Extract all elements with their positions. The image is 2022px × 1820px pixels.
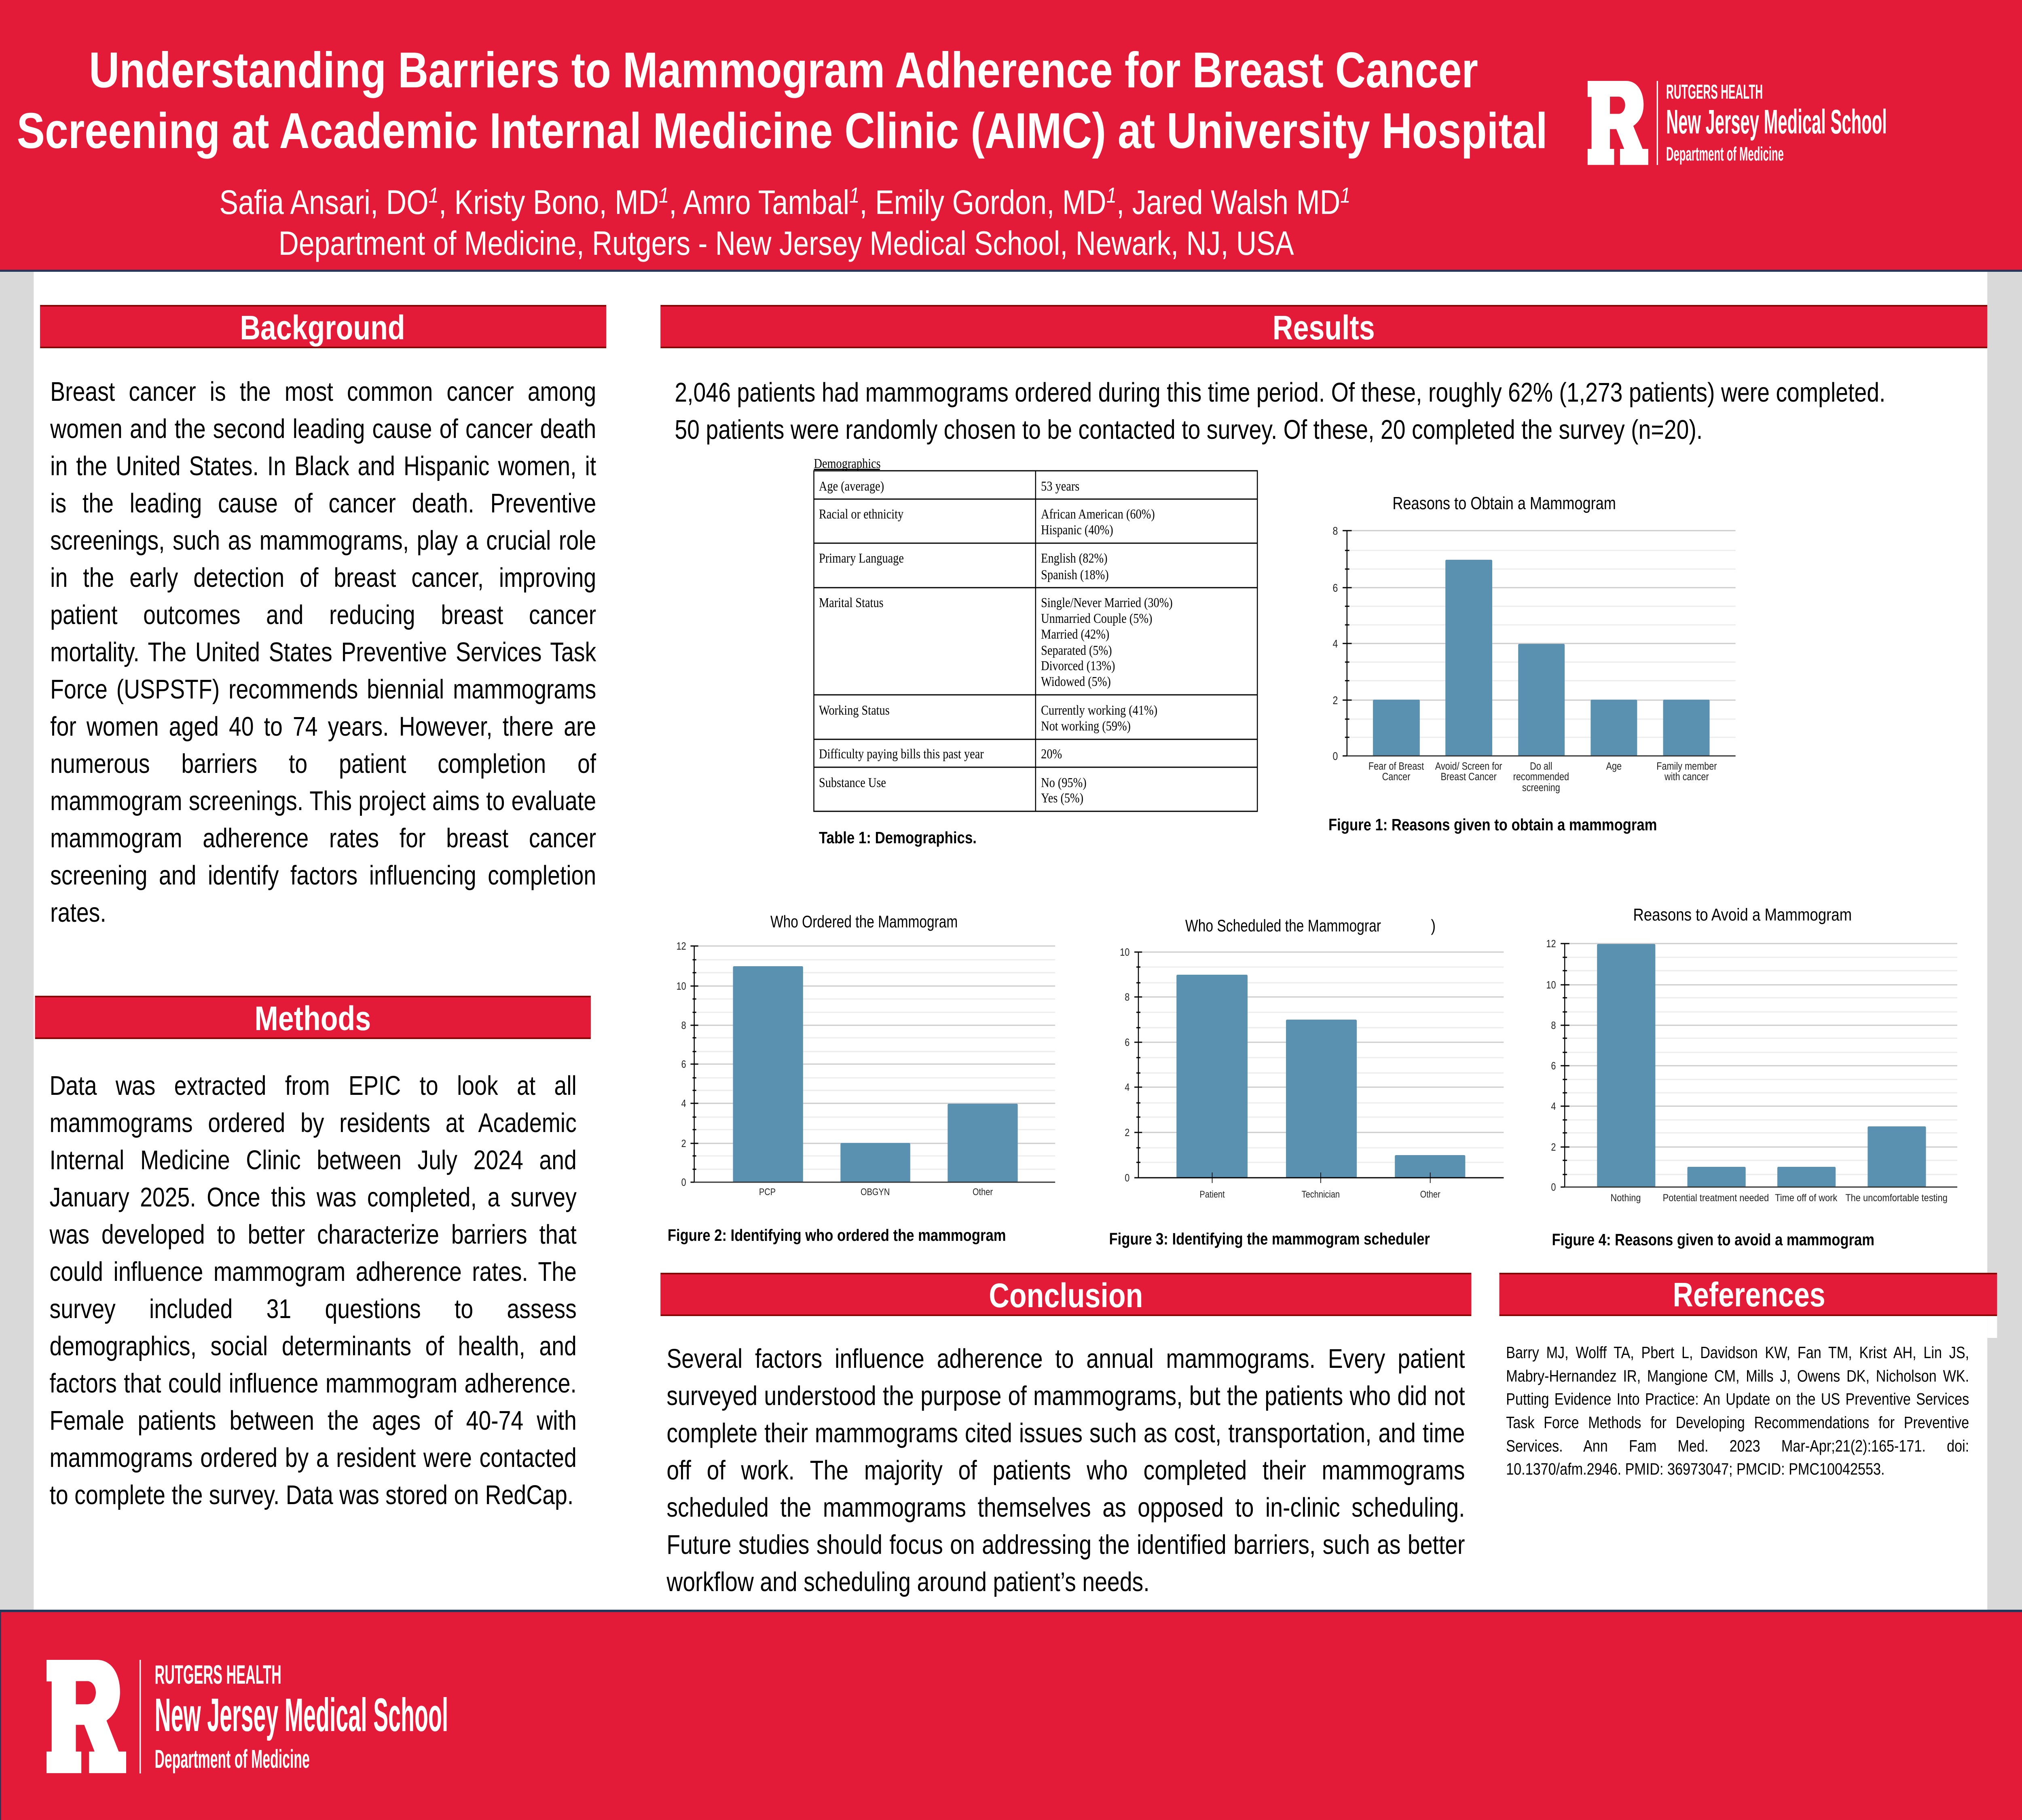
methods text: survey included 31 questions to assess xyxy=(49,1294,577,1324)
chart: who ordered the mammogram: 8 xyxy=(681,1020,686,1032)
chart: who scheduled the mammogram: 0 xyxy=(1125,1172,1129,1184)
chart: who scheduled the mammogram: 4 xyxy=(1125,1081,1129,1094)
table 1: demographics: Spanish (18%) xyxy=(1041,567,1109,582)
methods text: factors that could influence mammogram adherence. xyxy=(49,1369,577,1399)
icon: Rutgers block R logo mark xyxy=(47,1660,126,1773)
authors and affiliation: Safia Ansari, DO xyxy=(219,184,429,221)
chart: who ordered the mammogram: 4 xyxy=(681,1098,686,1110)
background side margins xyxy=(0,272,2022,1610)
chart: reasons to obtain a mammogram xyxy=(1332,493,1736,794)
chart: who scheduled the mammogram: 10 xyxy=(1120,946,1129,959)
chart: reasons to obtain a mammogram: 6 xyxy=(1332,582,1338,595)
background text: rates. xyxy=(50,898,106,928)
chart: reasons to obtain a mammogram: screening xyxy=(1522,782,1560,794)
logo wordmark: RUTGERS HEALTH xyxy=(1666,80,1763,103)
authors and affiliation: , Kristy Bono, MD xyxy=(439,184,659,221)
chart: reasons to obtain a mammogram: Avoid/ Screen for xyxy=(1435,760,1502,772)
table 1: demographics: Not working (59%) xyxy=(1041,718,1131,734)
section header: Background: Background xyxy=(240,309,405,347)
chart: reasons to obtain a mammogram: Do all xyxy=(1530,760,1552,772)
background text: is the leading cause of cancer death. Preventive xyxy=(50,489,596,518)
chart: reasons to obtain a mammogram: with cancer xyxy=(1664,771,1709,783)
results summary text xyxy=(675,374,1955,451)
chart: who ordered the mammogram: 2 xyxy=(681,1138,686,1150)
chart: who ordered the mammogram: 10 xyxy=(677,980,686,993)
footer band xyxy=(0,1610,2022,1820)
authors and affiliation: , Jared Walsh MD xyxy=(1117,184,1340,221)
chart: reasons to obtain a mammogram: Age xyxy=(1606,760,1622,772)
background text: in the United States. In Black and Hispanic women, it xyxy=(50,451,596,481)
chart: reasons to obtain a mammogram: recommended xyxy=(1513,771,1569,783)
table 1: demographics: Age (average) xyxy=(819,478,884,494)
chart: who scheduled the mammogram: Who Scheduled the Mammograr xyxy=(1185,916,1381,935)
logo divider xyxy=(1657,81,1658,165)
methods text: to complete the survey. Data was stored on RedCap. xyxy=(49,1480,573,1510)
footer logo xyxy=(47,1659,448,1773)
white notch behind references header xyxy=(1987,1273,1997,1338)
chart: reasons to avoid a mammogram: The uncomfortable testing xyxy=(1845,1192,1948,1203)
chart: who scheduled the mammogram: 6 xyxy=(1125,1037,1129,1049)
references text: Barry MJ, Wolff TA, Pbert L, Davidson KW, Fan TM, Krist AH, Lin JS, xyxy=(1506,1343,1969,1362)
results summary text: 2,046 patients had mammograms ordered during this time period. Of these, roughly 62% (1,273 patients) were completed. xyxy=(675,378,1885,408)
figure 4 caption: Figure 4: Reasons given to avoid a mammogram xyxy=(1552,1230,1874,1249)
chart: reasons to avoid a mammogram xyxy=(1546,905,1957,1203)
table 1: demographics: Working Status xyxy=(819,703,890,718)
chart: reasons to obtain a mammogram: 0 xyxy=(1332,750,1338,763)
table 1: demographics: 20% xyxy=(1041,746,1062,762)
conclusion text: off of work. The majority of patients who completed their mammograms xyxy=(666,1456,1465,1486)
conclusion text: complete their mammograms cited issues such as cost, transportation, and time xyxy=(666,1418,1465,1448)
logo wordmark xyxy=(1666,80,1887,165)
table 1: demographics: Single/Never Married (30%) xyxy=(1041,595,1173,610)
authors and affiliation: 1 xyxy=(1340,183,1350,207)
logo wordmark: RUTGERS HEALTH xyxy=(154,1659,281,1689)
chart: reasons to avoid a mammogram: 8 xyxy=(1551,1020,1556,1032)
section header: References xyxy=(1500,1273,1997,1316)
chart: reasons to obtain a mammogram: Reasons to Obtain a Mammogram xyxy=(1392,493,1616,513)
chart: who scheduled the mammogram: Other xyxy=(1420,1189,1440,1200)
authors and affiliation: 1 xyxy=(849,183,859,207)
figure 1 caption: Figure 1: Reasons given to obtain a mammogram xyxy=(1328,815,1657,834)
conclusion text: Several factors influence adherence to annual mammograms. Every patient xyxy=(666,1344,1465,1374)
background text: mortality. The United States Preventive Services Task xyxy=(50,637,596,667)
chart: reasons to obtain a mammogram: 4 xyxy=(1332,638,1338,650)
figure 3 caption: Figure 3: Identifying the mammogram scheduler xyxy=(1109,1230,1430,1248)
references text: Putting Evidence Into Practice: An Update on the US Preventive Services xyxy=(1506,1390,1969,1408)
conclusion text: workflow and scheduling around patient’s needs. xyxy=(666,1567,1150,1597)
background text xyxy=(50,373,596,940)
background text: screening and identify factors influencing completion xyxy=(50,861,596,891)
header band xyxy=(0,0,2022,272)
chart: reasons to avoid a mammogram: 0 xyxy=(1551,1181,1556,1194)
chart: who scheduled the mammogram: Patient xyxy=(1199,1189,1225,1200)
chart: reasons to avoid a mammogram: Time off of work xyxy=(1775,1192,1838,1203)
chart: who ordered the mammogram: 0 xyxy=(681,1177,686,1189)
background text: women and the second leading cause of cancer death xyxy=(50,414,596,444)
chart: who ordered the mammogram: 6 xyxy=(681,1058,686,1071)
logo wordmark: New Jersey Medical School xyxy=(154,1689,448,1741)
background text: mammogram screenings. This project aims to evaluate xyxy=(50,786,596,816)
main white content panel xyxy=(34,272,1987,1610)
chart: reasons to avoid a mammogram: Reasons to Avoid a Mammogram xyxy=(1633,905,1852,925)
table 1: demographics: African American (60%) xyxy=(1041,506,1155,522)
table 1: demographics: Demographics xyxy=(814,456,881,471)
methods text xyxy=(49,1067,577,1520)
table 1: demographics: Hispanic (40%) xyxy=(1041,522,1113,538)
table 1: demographics: Marital Status xyxy=(819,595,884,610)
chart: reasons to avoid a mammogram: 6 xyxy=(1551,1060,1556,1072)
chart: who scheduled the mammogram: 8 xyxy=(1125,991,1129,1003)
methods text: Female patients between the ages of 40-74 with xyxy=(49,1406,577,1436)
logo wordmark xyxy=(154,1659,448,1773)
table 1: demographics: Difficulty paying bills this past year xyxy=(819,746,984,762)
chart: reasons to avoid a mammogram: Nothing xyxy=(1610,1192,1641,1203)
methods text: Internal Medicine Clinic between July 2024 and xyxy=(49,1145,577,1175)
chart: reasons to obtain a mammogram: 2 xyxy=(1332,694,1338,707)
table 1: demographics: Unmarried Couple (5%) xyxy=(1041,611,1152,626)
figure 2 caption: Figure 2: Identifying who ordered the mammogram xyxy=(668,1226,1006,1244)
title: Understanding Barriers to Mammogram Adherence for Breast Cancer xyxy=(89,42,1478,98)
methods text: demographics, social determinants of health, and xyxy=(49,1331,577,1361)
section header: Results xyxy=(660,305,1987,348)
references text xyxy=(1506,1341,1969,1483)
chart: who ordered the mammogram xyxy=(677,912,1055,1197)
chart: reasons to avoid a mammogram: Potential treatment needed xyxy=(1663,1192,1769,1203)
section header: Methods xyxy=(35,996,591,1039)
authors and affiliation: 1 xyxy=(659,183,669,207)
authors and affiliation xyxy=(219,183,1350,262)
title xyxy=(17,42,1548,159)
table 1: demographics xyxy=(814,456,1257,811)
background text: for women aged 40 to 74 years. However, there are xyxy=(50,712,596,742)
background text: mammogram adherence rates for breast cancer xyxy=(50,823,596,853)
table 1: demographics: Married (42%) xyxy=(1041,626,1109,642)
table 1: demographics: 53 years xyxy=(1041,478,1079,494)
methods text: was developed to better characterize barriers that xyxy=(49,1220,577,1250)
background text: in the early detection of breast cancer, improving xyxy=(50,563,596,593)
chart: reasons to obtain a mammogram: Fear of Breast xyxy=(1368,760,1424,772)
chart: who scheduled the mammogram: Technician xyxy=(1302,1189,1340,1200)
table 1: demographics: Divorced (13%) xyxy=(1041,658,1115,673)
chart: who scheduled the mammogram xyxy=(1120,916,1504,1200)
table 1: demographics: Yes (5%) xyxy=(1041,790,1083,806)
references text: 10.1370/afm.2946. PMID: 36973047; PMCID: PMC10042553. xyxy=(1506,1460,1885,1478)
section header: Results: Results xyxy=(1273,309,1375,347)
authors and affiliation: , Amro Tambal xyxy=(669,184,849,221)
section header: Conclusion: Conclusion xyxy=(989,1277,1143,1314)
conclusion text: scheduled the mammograms themselves as opposed to in-clinic scheduling. xyxy=(666,1493,1465,1523)
table 1: demographics: English (82%) xyxy=(1041,550,1108,566)
methods text: mammograms ordered by a resident were contacted xyxy=(49,1443,577,1473)
conclusion text xyxy=(666,1340,1465,1603)
references text: Task Force Methods for Developing Recommendations for Preventive xyxy=(1506,1413,1969,1432)
chart: reasons to obtain a mammogram: Cancer xyxy=(1382,771,1410,783)
results summary text: 50 patients were randomly chosen to be contacted to survey. Of these, 20 completed the survey (n=20). xyxy=(675,415,1703,445)
chart: reasons to avoid a mammogram: 4 xyxy=(1551,1100,1556,1113)
methods text: Data was extracted from EPIC to look at all xyxy=(49,1071,577,1101)
background text: screenings, such as mammograms, play a crucial role xyxy=(50,526,596,556)
chart: who ordered the mammogram: 12 xyxy=(677,940,686,952)
background text: patient outcomes and reducing breast cancer xyxy=(50,600,596,630)
authors and affiliation: , Emily Gordon, MD xyxy=(859,184,1106,221)
table 1 caption: Table 1: Demographics. xyxy=(819,828,977,847)
authors and affiliation: 1 xyxy=(1106,183,1117,207)
background text: numerous barriers to patient completion of xyxy=(50,749,596,779)
chart: reasons to obtain a mammogram: Family member xyxy=(1656,760,1717,772)
title: Screening at Academic Internal Medicine Clinic (AIMC) at University Hospital xyxy=(17,103,1548,159)
conclusion text: Future studies should focus on addressing the identified barriers, such as better xyxy=(666,1530,1465,1560)
chart: reasons to obtain a mammogram: 8 xyxy=(1332,525,1338,538)
chart: reasons to avoid a mammogram: 10 xyxy=(1546,979,1556,991)
table 1: demographics: No (95%) xyxy=(1041,775,1087,790)
chart: who scheduled the mammogram: 2 xyxy=(1125,1127,1129,1139)
chart: who scheduled the mammogram: ) xyxy=(1431,916,1436,935)
conclusion text: surveyed understood the purpose of mammograms, but the patients who did not xyxy=(666,1381,1465,1411)
references text: Services. Ann Fam Med. 2023 Mar-Apr;21(2):165-171. doi: xyxy=(1506,1437,1969,1455)
methods text: mammograms ordered by residents at Academic xyxy=(49,1108,577,1138)
section header: Methods: Methods xyxy=(254,1000,371,1037)
chart: who ordered the mammogram: Who Ordered the Mammogram xyxy=(770,912,958,931)
table 1: demographics: Currently working (41%) xyxy=(1041,703,1157,718)
section header: Conclusion xyxy=(660,1273,1471,1316)
section header: Background xyxy=(40,305,606,348)
background text: Force (USPSTF) recommends biennial mammograms xyxy=(50,675,596,705)
header logo xyxy=(1588,80,1887,165)
table 1: demographics: Substance Use xyxy=(819,775,886,790)
chart: who ordered the mammogram: PCP xyxy=(759,1186,776,1197)
authors and affiliation: 1 xyxy=(429,183,439,207)
icon: Rutgers block R logo mark xyxy=(1588,81,1648,165)
logo wordmark: Department of Medicine xyxy=(154,1745,310,1773)
chart: reasons to obtain a mammogram: Breast Cancer xyxy=(1440,771,1497,783)
background text: Breast cancer is the most common cancer among xyxy=(50,377,596,407)
table 1: demographics: Racial or ethnicity xyxy=(819,506,904,522)
references text: Mabry-Hernandez IR, Mangione CM, Mills J, Owens DK, Nicholson WK. xyxy=(1506,1367,1969,1385)
table 1: demographics: Separated (5%) xyxy=(1041,643,1112,658)
chart: who ordered the mammogram: Other xyxy=(973,1186,993,1197)
section header: References: References xyxy=(1673,1276,1825,1314)
methods text: January 2025. Once this was completed, a survey xyxy=(49,1183,577,1213)
logo wordmark: Department of Medicine xyxy=(1666,144,1784,165)
chart: who ordered the mammogram: OBGYN xyxy=(861,1186,890,1197)
chart: reasons to avoid a mammogram: 2 xyxy=(1551,1141,1556,1153)
table 1: demographics: Widowed (5%) xyxy=(1041,674,1111,689)
methods text: could influence mammogram adherence rates. The xyxy=(49,1257,577,1287)
chart: reasons to avoid a mammogram: 12 xyxy=(1546,938,1556,950)
authors and affiliation: Department of Medicine, Rutgers - New Jersey Medical School, Newark, NJ, USA xyxy=(279,225,1294,262)
table 1: demographics: Primary Language xyxy=(819,550,904,566)
logo divider xyxy=(140,1660,141,1773)
